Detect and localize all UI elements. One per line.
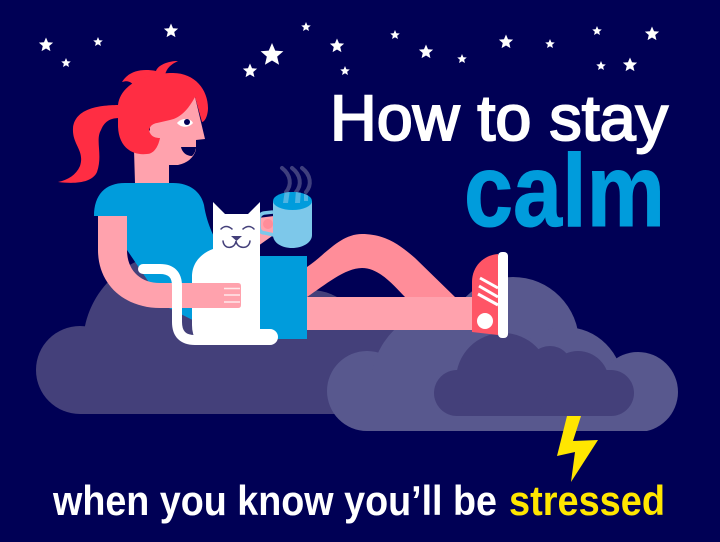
front leg (307, 297, 473, 330)
mouth (181, 147, 196, 156)
cat tail (143, 269, 215, 340)
ponytail (58, 105, 120, 183)
title: calm: calm (464, 133, 665, 248)
eye (177, 119, 193, 127)
coffee mug (259, 190, 312, 248)
neck and face (134, 97, 205, 183)
starry sky (39, 22, 659, 77)
title: how to stay: How to stay (330, 82, 668, 154)
shoe (472, 252, 508, 338)
fingers (224, 288, 240, 302)
back hand (258, 216, 275, 246)
shorts (258, 256, 307, 339)
cat face (221, 226, 254, 247)
woman (58, 61, 508, 339)
lightning bolt (557, 416, 598, 482)
inner dark cloud (434, 333, 634, 416)
front arm (98, 216, 241, 308)
hair (118, 73, 208, 154)
cat body (192, 202, 278, 345)
subtitle highlight: stressed: stressed (509, 477, 665, 524)
steam (282, 168, 310, 192)
subtitle: when you know you’ll be (52, 477, 497, 524)
cat (192, 202, 278, 345)
hair tuft (122, 61, 178, 90)
front storm cloud (327, 277, 678, 431)
back cloud (36, 262, 394, 414)
back leg (307, 234, 455, 297)
shirt (94, 183, 260, 339)
